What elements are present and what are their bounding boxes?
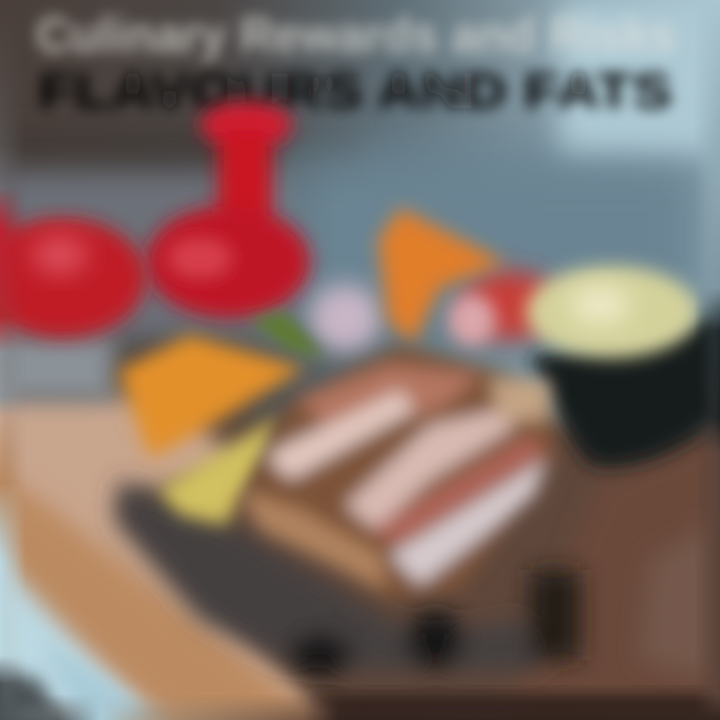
title line 2: FLAVOURS AND FATS [38, 63, 672, 119]
slate board [115, 480, 580, 677]
red tomato and cup [0, 218, 146, 400]
orange cheese wedge and herb [118, 312, 325, 458]
sliced meat on bread [240, 345, 555, 600]
red bottle [146, 101, 310, 318]
onion and pepper slices [309, 271, 558, 352]
black bowl with mash [526, 266, 720, 467]
wooden table [0, 395, 720, 720]
orange wedge [378, 208, 505, 345]
title lettering [36, 7, 676, 119]
title line 1: Culinary Rewards and Risks [36, 7, 676, 63]
yellow lemon wedge [158, 415, 280, 525]
